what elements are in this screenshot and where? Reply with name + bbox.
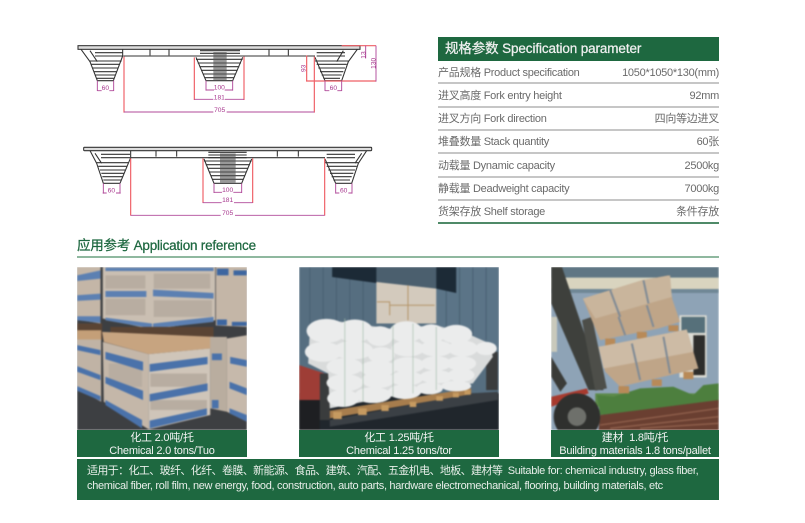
caption: chemical 1.25 tons: Chemical 1.25 tons/tor — [346, 445, 452, 457]
suitable-for band: 适用于：化工、玻纤、化纤、卷膜、新能源、食品、建筑、汽配、五金机电、地板、建材等 Suitable for: chemical industry, glass fiber, — [87, 465, 698, 477]
caption: chemical 1.25 tons: 化工 1.25吨/托 — [364, 432, 434, 444]
row: shelf storage — [438, 201, 719, 224]
technical drawing: pallet side view top: 100 — [214, 84, 225, 91]
row: fork entry height — [438, 85, 719, 108]
row: fork entry height: 进叉高度 Fork entry height — [438, 90, 562, 102]
caption: chemical 1.25 tons — [299, 430, 499, 457]
technical drawing: pallet side view top — [77, 45, 377, 114]
row: fork direction: 四向等边进叉 — [655, 113, 719, 125]
row: shelf storage: 货架存放 Shelf storage — [438, 206, 545, 218]
row: dynamic capacity: 动载量 Dynamic capacity — [438, 160, 555, 172]
suitable-for band: chemical fiber, roll film, new energy, food, construction, auto parts, hardware electromechanical, flooring, building materials, etc — [87, 480, 663, 492]
caption: building materials 1.8 tons: Building materials 1.8 tons/pallet — [559, 445, 711, 457]
row: deadweight capacity — [438, 178, 719, 201]
row: product specification — [438, 62, 719, 84]
technical drawing: pallet side view top: 181 — [214, 95, 225, 102]
section heading: 应用参考 Application reference — [77, 238, 256, 253]
photo: boxed chemical cartons on pallets — [77, 267, 247, 430]
technical drawing: pallet side view bottom: 100 — [222, 187, 234, 194]
caption: chemical 2.0 tons — [77, 430, 247, 457]
row: deadweight capacity: 静载量 Deadweight capacity — [438, 183, 569, 195]
row: fork entry height: 92mm — [690, 90, 719, 102]
technical drawing: pallet side view bottom: 181 — [222, 197, 234, 204]
row: product specification: 产品规格 Product specification — [438, 67, 580, 79]
suitable-for band — [77, 459, 719, 500]
row: dynamic capacity: 2500kg — [685, 160, 719, 172]
row: stack quantity: 60张 — [697, 136, 719, 148]
photo: white sacks on truck — [299, 267, 499, 430]
caption: building materials 1.8 tons — [551, 430, 719, 457]
spec table header: 规格参数 Specification parameter — [445, 41, 641, 56]
technical drawing: pallet side view bottom: 60 — [108, 188, 115, 195]
row: product specification: 1050*1050*130(mm) — [622, 67, 719, 79]
technical drawing: pallet side view bottom: 705 — [222, 210, 234, 217]
caption: chemical 2.0 tons: Chemical 2.0 tons/Tuo — [109, 445, 215, 457]
spec table header — [438, 37, 719, 61]
technical drawing: pallet side view top: 705 — [214, 107, 226, 114]
row: shelf storage: 条件存放 — [676, 206, 719, 218]
technical drawing: pallet side view top: 93 — [300, 64, 307, 72]
row: stack quantity: 堆叠数量 Stack quantity — [438, 136, 549, 148]
technical drawing: pallet side view top: 130 — [370, 57, 377, 69]
caption: building materials 1.8 tons: 建材 1.8吨/托 — [602, 432, 668, 444]
technical drawing: pallet side view top: 60 — [102, 85, 109, 92]
row: dynamic capacity — [438, 155, 719, 178]
technical drawing: pallet side view bottom: 60 — [340, 188, 348, 195]
row: deadweight capacity: 7000kg — [685, 183, 719, 195]
caption: chemical 2.0 tons: 化工 2.0吨/托 — [130, 432, 194, 444]
spec table — [438, 66, 719, 224]
row: fork direction: 进叉方向 Fork direction — [438, 113, 547, 125]
technical drawing: pallet side view top: 60 — [330, 85, 337, 92]
photo: forklift carrying sacks — [551, 267, 719, 430]
technical drawing: pallet side view top: 13 — [360, 51, 367, 59]
row: fork direction — [438, 108, 719, 131]
row: stack quantity — [438, 131, 719, 154]
section heading — [77, 237, 719, 258]
technical drawing: pallet side view bottom — [83, 146, 372, 217]
